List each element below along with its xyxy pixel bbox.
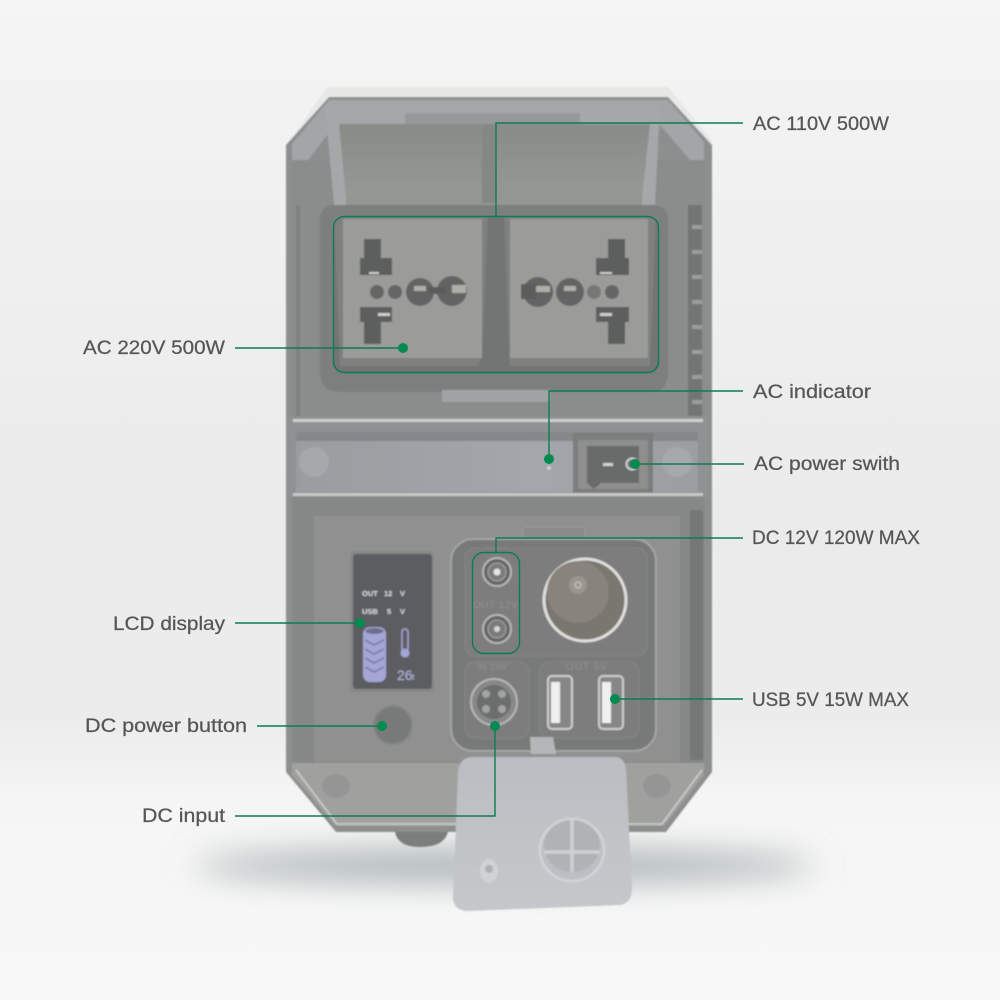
callout: DC 12V 120W MAX: DC 12V 120W MAX: [752, 528, 920, 549]
callout: LCD display: [113, 614, 365, 635]
callout: DC input: [142, 721, 500, 827]
LCD display: 5: [387, 607, 391, 616]
callout: USB 5V 15W MAX: [610, 690, 909, 711]
DC 12V outputs: OUT 12V: [473, 600, 518, 611]
flap peg: [480, 859, 498, 883]
AC socket lid: [325, 105, 660, 205]
DC 12V outputs: [473, 558, 518, 643]
switch band: [288, 416, 708, 498]
callout: AC 110V 500W: [334, 114, 889, 372]
callout: AC 110V 500W: AC 110V 500W: [753, 114, 889, 135]
AC power switch: [573, 433, 653, 493]
USB ports: OUT 5V: [566, 662, 608, 673]
callout: AC power swith: AC power swith: [754, 454, 900, 475]
side vents: [296, 205, 703, 760]
DC input port: IN 19V: [477, 662, 508, 673]
callout: USB 5V 15W MAX: USB 5V 15W MAX: [752, 690, 909, 711]
DC port panel: [451, 527, 656, 751]
callout: DC power button: [85, 716, 387, 737]
callout: DC power button: DC power button: [85, 716, 247, 737]
LCD display: V: [400, 589, 405, 598]
lower body: [292, 497, 704, 763]
cigarette lighter socket: [544, 559, 626, 641]
LCD display: [350, 551, 434, 692]
AC indicator light: [547, 466, 551, 470]
callout: AC power swith: [630, 454, 900, 475]
left AC socket: [334, 216, 488, 366]
LCD display: USB: [362, 607, 378, 616]
callout: AC indicator: AC indicator: [753, 382, 872, 403]
callout: AC 220V 500W: [83, 338, 408, 359]
USB ports: [548, 662, 623, 729]
callout: AC indicator: [544, 382, 872, 464]
flap ring: [540, 819, 604, 881]
dust flap: [453, 737, 632, 911]
callout: DC 12V 120W MAX: [472, 528, 920, 654]
LCD display: t: [412, 672, 415, 682]
LCD display: 26: [397, 667, 413, 683]
LCD display: OUT: [362, 589, 378, 598]
right AC socket: [504, 216, 656, 366]
DC power button: [373, 705, 413, 745]
AC socket recess: [320, 205, 668, 392]
LCD display: 12: [384, 589, 392, 598]
floor shadow: [195, 849, 815, 883]
callout: AC 220V 500W: AC 220V 500W: [83, 338, 225, 359]
DC input port: [471, 662, 517, 725]
LCD display: V: [400, 607, 405, 616]
power station body: [286, 87, 712, 911]
callout: DC input: DC input: [142, 806, 226, 827]
callout: LCD display: LCD display: [113, 614, 226, 635]
